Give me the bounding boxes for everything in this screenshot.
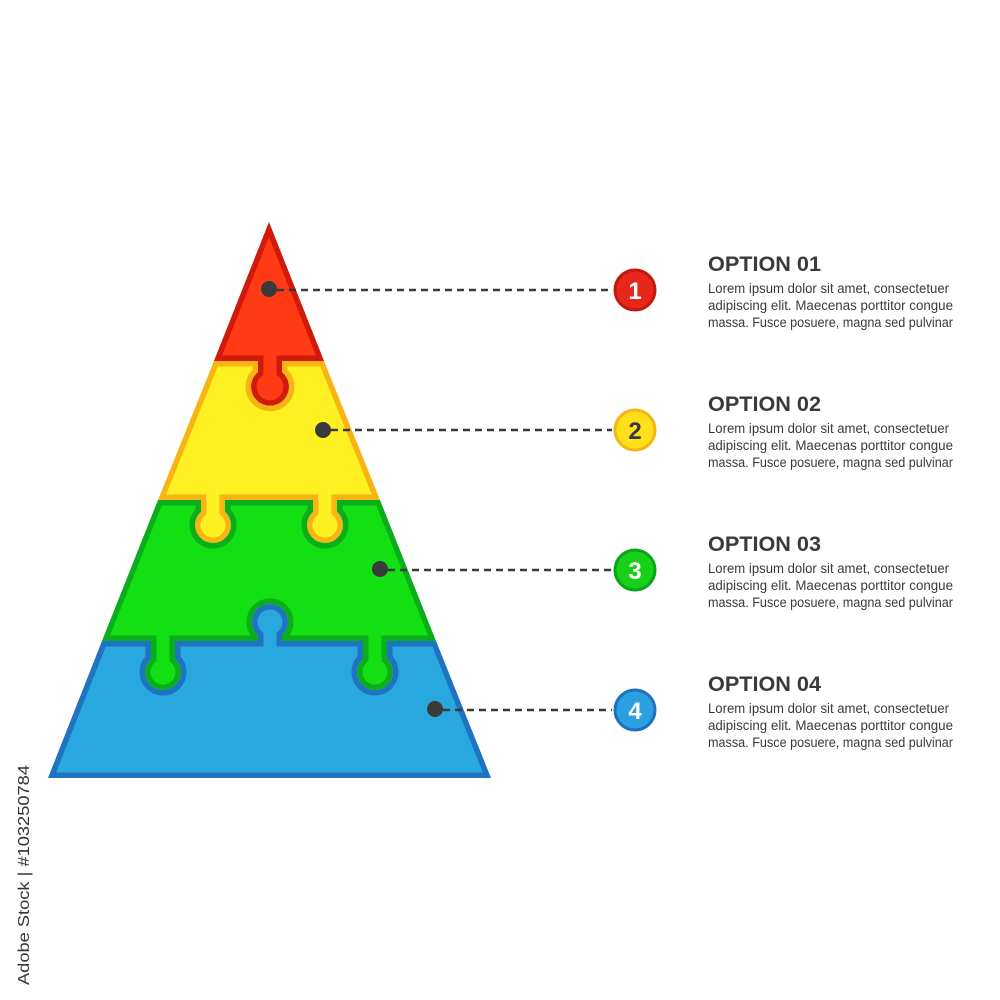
text block 4: Lorem ipsum dolor sit amet, consectetuer xyxy=(708,701,949,716)
text block 4: massa. Fusce posuere, magna sed pulvinar xyxy=(708,735,953,750)
badge 4 xyxy=(615,690,655,730)
text block 3: massa. Fusce posuere, magna sed pulvinar xyxy=(708,595,953,610)
text block 2 xyxy=(708,393,953,470)
pyramid puzzle xyxy=(48,222,491,778)
badge 1 xyxy=(615,270,655,310)
connector 3 xyxy=(372,561,612,577)
badge 1: 1 xyxy=(628,278,642,305)
text block 2: adipiscing elit. Maecenas porttitor congue xyxy=(708,438,953,453)
text block 3 xyxy=(708,533,953,610)
connector 1 xyxy=(261,281,612,297)
piece: blue xyxy=(48,604,491,778)
text block 4 xyxy=(708,673,953,750)
connector 4 xyxy=(427,701,612,717)
text block 1: adipiscing elit. Maecenas porttitor congue xyxy=(708,298,953,313)
connector 2 xyxy=(315,422,612,438)
text block 4: adipiscing elit. Maecenas porttitor congue xyxy=(708,718,953,733)
piece: yellow xyxy=(158,361,380,543)
text block 3: OPTION 03 xyxy=(708,533,821,556)
piece: red top xyxy=(214,222,324,406)
text block 2: massa. Fusce posuere, magna sed pulvinar xyxy=(708,455,953,470)
text block 2: OPTION 02 xyxy=(708,393,821,416)
badge 2: 2 xyxy=(628,418,642,445)
badge 2 xyxy=(615,410,655,450)
text block 4: OPTION 04 xyxy=(708,673,821,696)
text block 3: adipiscing elit. Maecenas porttitor congue xyxy=(708,578,953,593)
piece: green xyxy=(102,500,436,690)
text block 2: Lorem ipsum dolor sit amet, consectetuer xyxy=(708,421,949,436)
badge 3: 3 xyxy=(628,558,642,585)
text block 3: Lorem ipsum dolor sit amet, consectetuer xyxy=(708,561,949,576)
badge 3 xyxy=(615,550,655,590)
text block 1: Lorem ipsum dolor sit amet, consectetuer xyxy=(708,281,949,296)
text block 1: massa. Fusce posuere, magna sed pulvinar xyxy=(708,315,953,330)
text block 1: OPTION 01 xyxy=(708,253,821,276)
badge 4: 4 xyxy=(628,698,642,725)
watermark id: Adobe Stock | #103250784 xyxy=(16,765,33,985)
text block 1 xyxy=(708,253,953,330)
